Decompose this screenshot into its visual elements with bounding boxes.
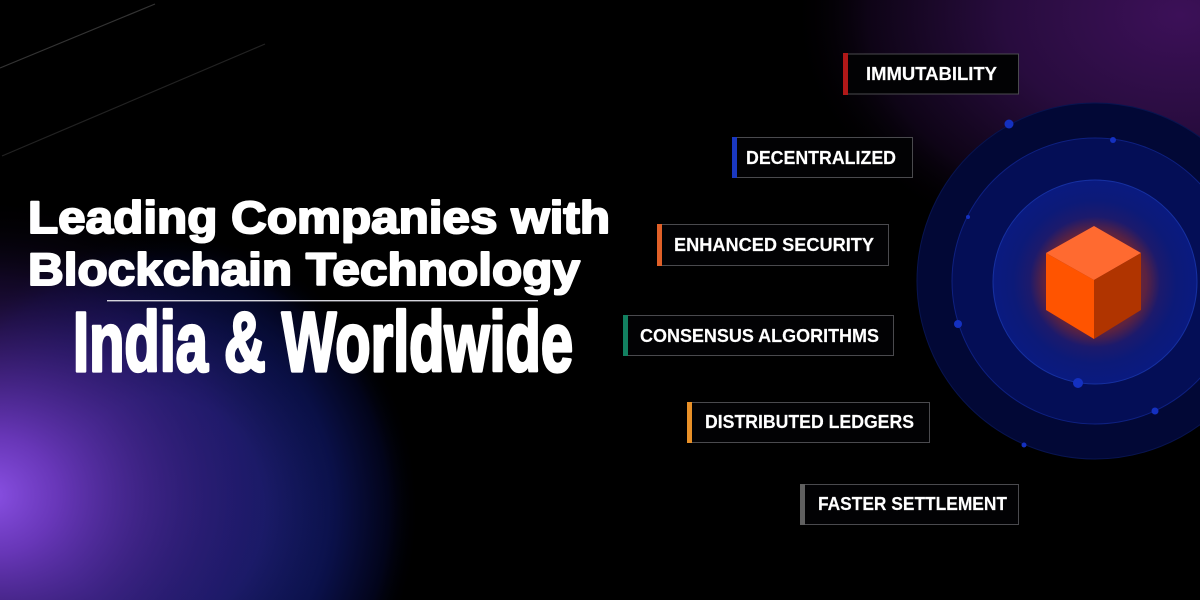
- label: distributed ledgers: DISTRIBUTED LEDGERS: [705, 412, 914, 432]
- middle orbit ring: [952, 138, 1200, 424]
- label: decentralized: [732, 137, 912, 178]
- label: faster settlement: FASTER SETTLEMENT: [818, 494, 1007, 514]
- title divider: [107, 300, 538, 301]
- orbit nodes: [954, 120, 1158, 448]
- heading line 1: Leading Companies with: [28, 192, 610, 243]
- label: enhanced security: ENHANCED SECURITY: [674, 235, 874, 255]
- label: enhanced security: [657, 224, 888, 266]
- label: immutability: [843, 53, 1018, 95]
- inner orbit ring: [993, 180, 1197, 384]
- icon: orange cube: [1046, 226, 1141, 339]
- heading line 2: Blockchain Technology: [28, 244, 580, 295]
- label: distributed ledgers: [687, 402, 930, 443]
- heading line 3: India & Worldwide: [73, 295, 573, 389]
- label: consensus algorithms: CONSENSUS ALGORITHMS: [640, 326, 879, 346]
- label: faster settlement: [800, 484, 1018, 525]
- outer orbit ring: [917, 103, 1200, 459]
- label: decentralized: DECENTRALIZED: [746, 148, 896, 168]
- title: [28, 192, 610, 389]
- label: consensus algorithms: [623, 315, 894, 356]
- orbit diagram: [917, 103, 1200, 459]
- label: immutability: IMMUTABILITY: [866, 64, 997, 84]
